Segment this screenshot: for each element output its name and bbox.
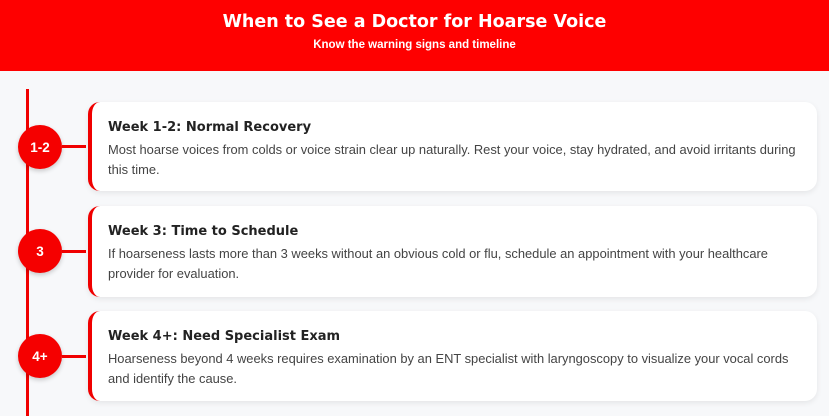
card: week 4+: Week 4+: Need Specialist Exam — [108, 329, 340, 344]
card: week 1-2: Most hoarse voices from colds or voice strain clear up naturally. Rest your voice, stay hydrated, and avoid irritants during this time. — [108, 142, 796, 177]
connector 1 — [62, 145, 86, 148]
card: week 3 — [88, 206, 817, 297]
marker 3: 3 — [36, 244, 44, 258]
marker 1-2: 1-2 — [30, 140, 50, 154]
header: When to See a Doctor for Hoarse Voice — [223, 12, 606, 32]
header: Know the warning signs and timeline — [313, 39, 516, 51]
marker 4+: 4+ — [32, 348, 48, 364]
card: week 4+: Hoarseness beyond 4 weeks requires examination by an ENT specialist with laryngoscopy to visualize your vocal cords and identify the cause. — [108, 351, 788, 386]
connector 3 — [62, 355, 86, 358]
card: week 4+ — [88, 311, 817, 401]
card: week 1-2 — [88, 102, 817, 191]
card: week 3: Week 3: Time to Schedule — [108, 224, 298, 239]
marker 3 — [18, 229, 62, 273]
marker 1-2 — [18, 125, 62, 169]
timeline line — [26, 89, 29, 416]
connector 2 — [62, 250, 86, 253]
marker 4+ — [18, 334, 62, 378]
card: week 1-2: Week 1-2: Normal Recovery — [108, 120, 311, 135]
card: week 3: If hoarseness lasts more than 3 weeks without an obvious cold or flu, schedule an appointment with your healthcare provider for evaluation. — [108, 246, 768, 281]
header — [0, 0, 829, 71]
